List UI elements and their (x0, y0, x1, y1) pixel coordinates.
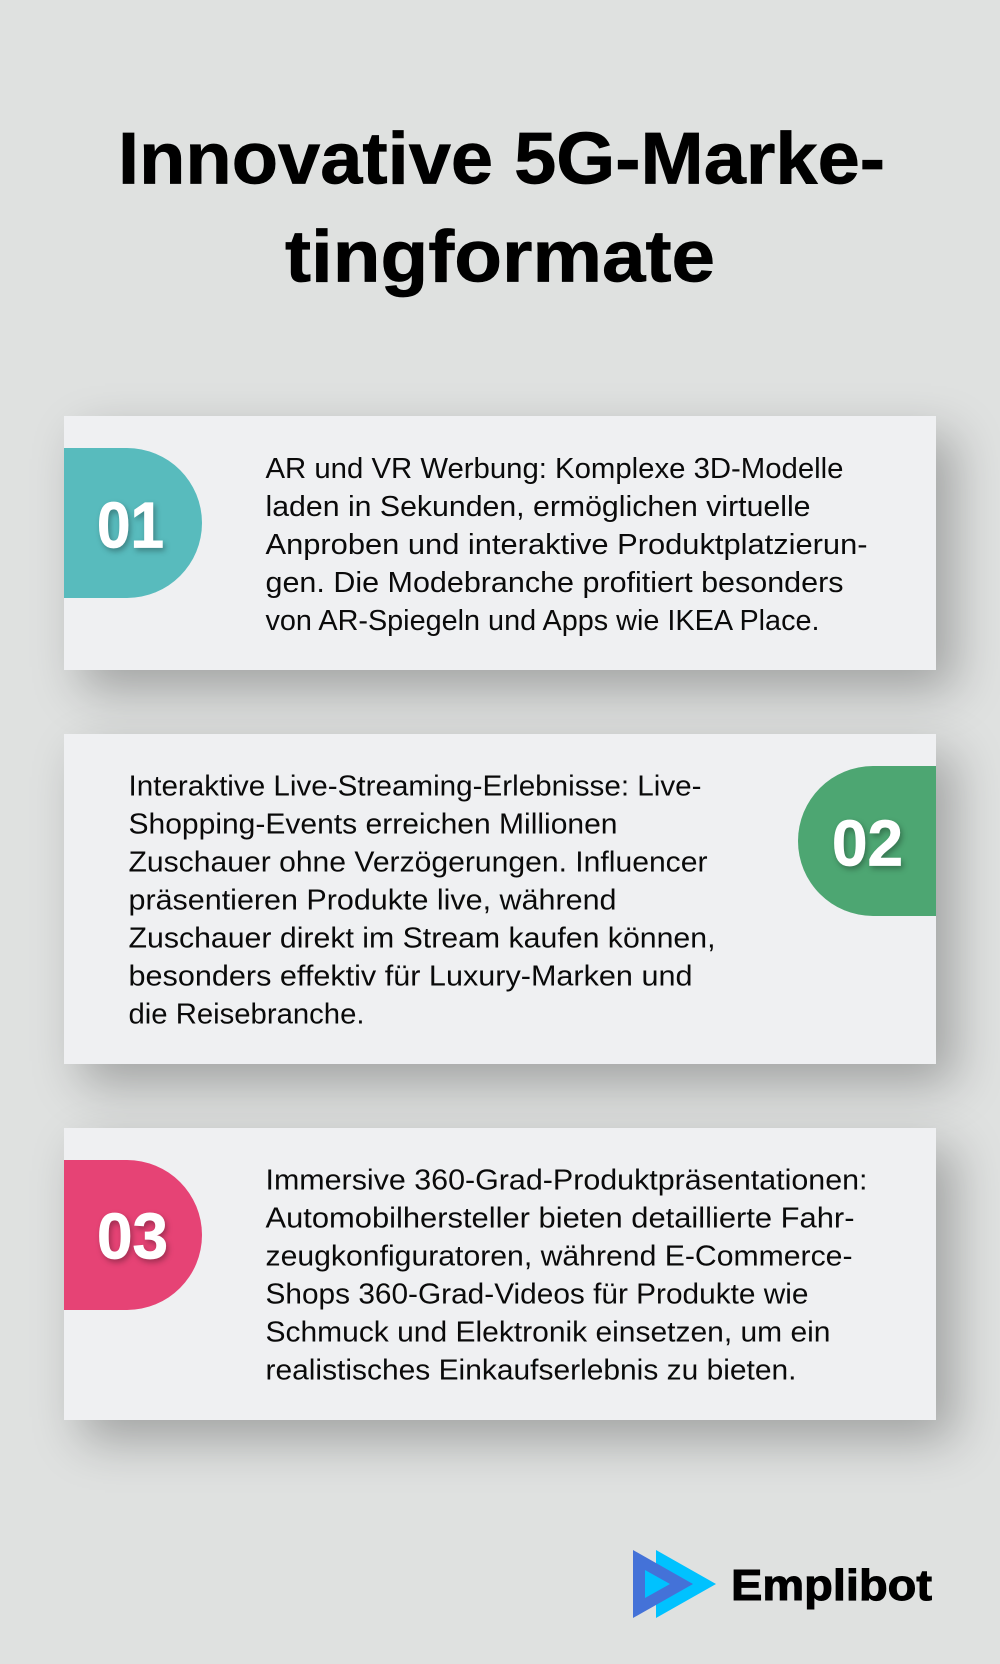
text block: card 3: Schmuck und Elektronik einsetzen, um ein (266, 1316, 830, 1348)
panel: card 2 Interaktive Live-Streaming-Erlebnisse (64, 734, 936, 1064)
text block: card 2: Zuschauer ohne Verzögerungen. Influencer (128, 846, 708, 878)
text block: card 1: Anproben und interaktive Produktplatzierun- (266, 529, 868, 561)
badge 02 (798, 766, 936, 916)
badge 01: 01 (97, 488, 164, 562)
text block: card 2: besonders effektiv für Luxury-Marken und (128, 960, 692, 992)
text block: card 1 (266, 453, 868, 637)
text block: card 2: Interaktive Live-Streaming-Erlebnisse: Live- (128, 770, 702, 802)
text block: card 2: Shopping-Events erreichen Millionen (128, 808, 618, 840)
text block: card 3 (266, 1164, 868, 1386)
text block: card 1: gen. Die Modebranche profitiert besonders (266, 567, 844, 599)
text block: card 2: Zuschauer direkt im Stream kaufen können, (128, 922, 716, 954)
text block: card 3: Shops 360-Grad-Videos für Produkte wie (266, 1278, 808, 1310)
logo: Emplibot (633, 1550, 932, 1618)
text block: card 3: realistisches Einkaufserlebnis zu bieten. (266, 1354, 796, 1386)
panel: card 3 Immersive 360-Grad-Produktpräsentationen (64, 1128, 936, 1420)
text block: card 2 (128, 770, 716, 1030)
text block: card 2: präsentieren Produkte live, während (128, 884, 616, 916)
badge 03 (64, 1160, 202, 1310)
text block: card 1: laden in Sekunden, ermöglichen virtuelle (266, 491, 810, 523)
badge 01 (64, 448, 202, 598)
badge 02: 02 (832, 806, 903, 880)
title (118, 118, 885, 298)
text block: card 3: Immersive 360-Grad-Produktpräsentationen: (266, 1164, 868, 1196)
text block: card 3: zeugkonfiguratoren, während E-Commerce- (266, 1240, 852, 1272)
badge 03: 03 (97, 1200, 168, 1272)
logo wordmark: Emplibot (731, 1561, 932, 1610)
title: Innovative 5G-Marke- (118, 118, 885, 200)
icon: play triangles (633, 1550, 716, 1618)
text block: card 1: AR und VR Werbung: Komplexe 3D-Modelle (266, 453, 844, 485)
text block: card 1: von AR-Spiegeln und Apps wie IKEA Place. (266, 605, 820, 637)
text block: card 2: die Reisebranche. (128, 998, 364, 1030)
title: tingformate (285, 216, 715, 298)
panel: card 1 AR und VR Werbung (64, 416, 936, 670)
text block: card 3: Automobilhersteller bieten detaillierte Fahr- (266, 1202, 854, 1234)
